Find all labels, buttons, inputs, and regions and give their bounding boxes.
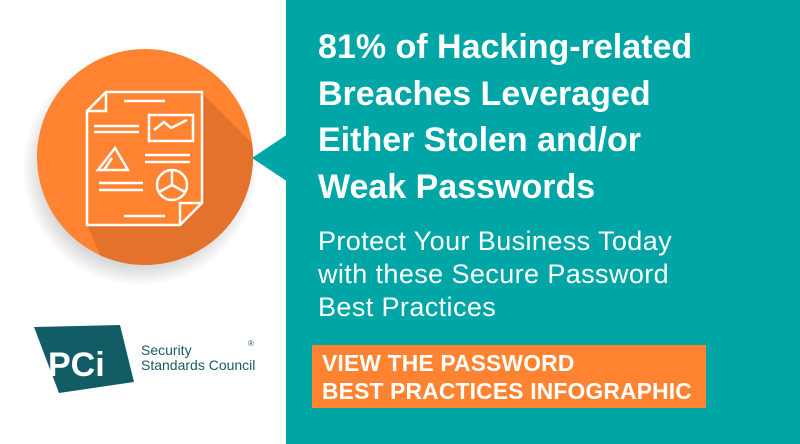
button: CTA: BEST PRACTICES INFOGRAPHIC [322,378,692,404]
icon: document circle [26,49,254,282]
title: Breaches Leveraged [318,74,651,112]
button: CTA [312,345,706,408]
subtitle: Best Practices [318,292,496,322]
subtitle [318,226,672,322]
logo: PCI: Security [141,342,192,358]
subtitle: Protect Your Business Today [318,226,672,256]
panel: teal [286,0,800,444]
title: Weak Passwords [318,168,595,206]
logo: PCI [34,325,255,393]
arrow: pointer [253,135,286,181]
button: CTA: VIEW THE PASSWORD [322,350,574,376]
logo: PCI: PCi [48,346,105,384]
logo: PCI: ® [248,339,254,348]
subtitle: with these Secure Password [318,259,669,289]
title: Either Stolen and/or [318,121,641,159]
title [318,28,692,206]
logo: PCI: Standards Council [141,357,255,373]
title: 81% of Hacking-related [318,28,692,66]
